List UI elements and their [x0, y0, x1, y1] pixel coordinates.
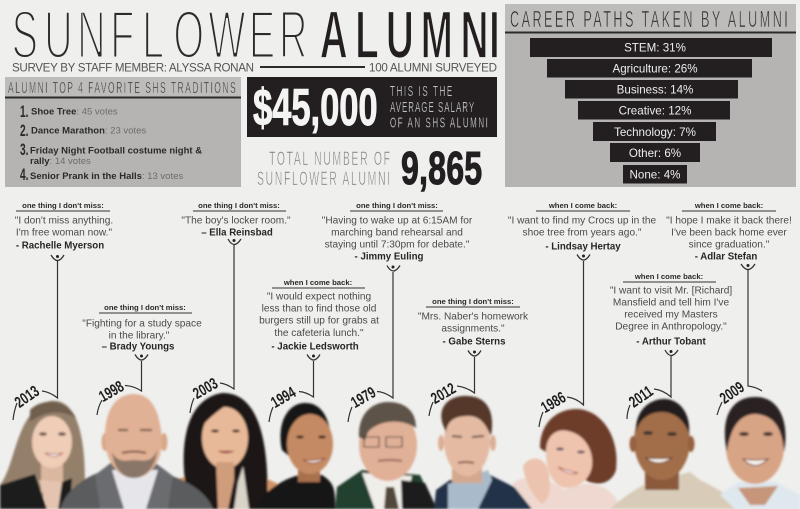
callout: Ella Reinsbad: "The boy's locker room."	[181, 216, 291, 226]
timeline: 2003	[189, 239, 241, 413]
timeline: 1986: 1986	[537, 388, 569, 416]
callout: Gabe Sterns: "Mrs. Naber's homework	[418, 312, 529, 322]
callout: Jimmy Euling: one thing I don't miss:	[356, 201, 438, 210]
callout: Adlar Stefan	[666, 201, 792, 262]
callout: Jackie Ledsworth: - Jackie Ledsworth	[271, 342, 359, 352]
callout: Gabe Sterns	[418, 297, 529, 348]
callout: Jimmy Euling: marching band rehearsal and	[331, 228, 463, 238]
callout: Brady Youngs	[82, 303, 202, 352]
salary caption: THIS IS THE	[390, 84, 452, 100]
callout: Arthur Tobant: Mansfield and tell him I've	[613, 298, 729, 308]
callout: Brady Youngs: "Fighting for a study space	[82, 318, 202, 330]
callout: Arthur Tobant: - Arthur Tobant	[636, 336, 706, 348]
funnel chart: None: 4%	[630, 168, 680, 182]
salary caption: AVERAGE SALARY	[390, 100, 474, 116]
callout: Jackie Ledsworth: the cafeteria lunch."	[274, 328, 364, 339]
callout: Jackie Ledsworth: less than to find those old	[262, 304, 376, 314]
callout: Jimmy Euling	[322, 201, 473, 262]
title	[12, 0, 500, 73]
timeline: 1979	[347, 266, 400, 422]
timeline: 2012	[427, 350, 481, 416]
timeline: 1979: 1979	[347, 383, 379, 411]
total alumni stat: TOTAL NUMBER OF	[269, 149, 390, 170]
callout: Ella Reinsbad	[181, 201, 291, 238]
callout: Adlar Stefan: I've been back home ever	[671, 228, 787, 238]
portrait: 1998 man	[60, 394, 213, 509]
callout: Adlar Stefan: - Adlar Stefan	[695, 252, 757, 262]
total alumni stat: SUNFLOWER ALUMNI	[257, 169, 390, 190]
timeline: 1994: 1994	[267, 383, 299, 411]
callout: Lindsay Hertay: when I come back:	[548, 201, 617, 210]
portrait: 1986 woman	[512, 409, 621, 509]
funnel chart: Business: 14%	[617, 84, 693, 96]
salary caption	[390, 84, 488, 131]
list: traditions: 2.	[20, 120, 29, 140]
callout: Lindsay Hertay: - Lindsay Hertay	[545, 242, 621, 252]
callout: Arthur Tobant: "I want to visit Mr. [Richard]	[610, 286, 732, 296]
heading: traditions: ALUMNI TOP 4 FAVORITE SHS TRADITIONS	[8, 79, 236, 97]
heading: career paths: CAREER PATHS TAKEN BY ALUMNI	[510, 6, 788, 32]
timeline: 2009	[716, 264, 762, 415]
callout: Jackie Ledsworth: "I would expect nothing	[267, 292, 371, 302]
funnel chart: Other: 6%	[629, 147, 681, 160]
portrait: 2009 man	[720, 397, 800, 509]
funnel chart	[530, 38, 772, 184]
funnel chart: Creative: 12%	[619, 104, 691, 118]
timeline: 2009: 2009	[716, 377, 748, 407]
callout: Adlar Stefan: when I come back:	[694, 201, 763, 210]
funnel chart: Technology: 7%	[614, 126, 696, 139]
timeline: 2013: 2013	[11, 381, 43, 411]
total alumni stat	[257, 143, 482, 194]
callout: Jackie Ledsworth: when I come back:	[283, 278, 352, 287]
funnel chart: STEM: 31%	[624, 42, 686, 54]
list: traditions: rally: 14 votes	[30, 156, 91, 167]
timeline: 2011	[625, 350, 678, 419]
portrait: 1994 woman	[254, 403, 335, 509]
callout: Arthur Tobant: when I come back:	[634, 272, 703, 281]
portrait: 1979 man	[335, 402, 437, 509]
callout: Lindsay Hertay: shoe tree from years ago."	[523, 228, 642, 238]
list: traditions: Friday Night Football costume night &	[30, 146, 202, 156]
portraits row	[0, 393, 800, 509]
timeline: 1994	[267, 354, 320, 422]
portrait: 2011 man	[610, 399, 741, 509]
callout: Arthur Tobant: received my Masters	[624, 310, 718, 320]
callout: Rachelle Myerson: - Rachelle Myerson	[16, 240, 104, 252]
timeline: 1986	[537, 254, 590, 427]
survey credit line: 100 ALUMNI SURVEYED	[369, 62, 497, 74]
callout: Gabe Sterns: assignments."	[441, 324, 505, 334]
callout: Rachelle Myerson: one thing I don't miss:	[22, 201, 104, 210]
survey credit line	[12, 62, 497, 74]
panel: average salary	[247, 77, 497, 137]
timeline: 2013	[11, 255, 64, 420]
callout: Arthur Tobant	[610, 272, 732, 348]
callout: Brady Youngs: one thing I don't miss:	[104, 303, 186, 312]
callout: Lindsay Hertay	[508, 201, 656, 252]
timeline: 1998	[95, 354, 148, 415]
salary figure: $45,000	[253, 79, 378, 137]
callout: Ella Reinsbad: – Ella Reinsbad	[201, 228, 273, 238]
timeline: 2012: 2012	[427, 379, 459, 407]
list: traditions: 1.	[20, 101, 29, 121]
list: traditions: Shoe Tree: 45 votes	[31, 106, 118, 118]
callout: Jimmy Euling: "Having to wake up at 6:15AM for	[322, 216, 473, 226]
callout: Brady Youngs: – Brady Youngs	[102, 342, 174, 352]
callout: Lindsay Hertay: "I want to find my Crocs up in the	[508, 216, 656, 226]
total alumni stat: 9,865	[401, 143, 482, 194]
callout: Jackie Ledsworth: burgers still up for grabs at	[259, 316, 379, 326]
list: traditions: 3.	[20, 139, 29, 159]
callout: Rachelle Myerson: "I don't miss anything.	[15, 216, 113, 226]
callout: Rachelle Myerson: I'm free woman now."	[16, 228, 112, 238]
survey credit line: SURVEY BY STAFF MEMBER: ALYSSA RONAN	[12, 62, 254, 74]
callout: Adlar Stefan: "I hope I make it back there!	[666, 216, 792, 226]
portrait: 2013 woman	[0, 401, 85, 509]
callout: Ella Reinsbad: one thing I don't miss:	[198, 201, 280, 210]
salary caption: OF AN SHS ALUMNI	[390, 115, 488, 131]
callout: Gabe Sterns: one thing I don't miss:	[432, 297, 514, 306]
callout: Arthur Tobant: Degree in Anthropology."	[615, 322, 727, 332]
panel: career paths	[505, 4, 796, 187]
callout: Jackie Ledsworth	[259, 278, 379, 352]
timeline: 1998: 1998	[95, 377, 127, 405]
callout: Jimmy Euling: - Jimmy Euling	[355, 252, 424, 262]
list: traditions: 4.	[20, 164, 29, 184]
list: traditions	[20, 101, 202, 184]
portrait: 2012 man	[434, 396, 541, 509]
callout: Gabe Sterns: - Gabe Sterns	[442, 336, 506, 348]
timeline: 2011: 2011	[625, 381, 656, 411]
list: traditions: Senior Prank in the Halls: 13 votes	[30, 171, 183, 182]
funnel chart: Agriculture: 26%	[612, 62, 698, 76]
callout: Jimmy Euling: staying until 7:30pm for debate."	[325, 240, 470, 250]
callout: Brady Youngs: in the library."	[109, 330, 170, 342]
list: traditions: Dance Marathon: 23 votes	[31, 126, 146, 136]
callout: Rachelle Myerson	[15, 201, 113, 252]
portrait: 2003 woman	[176, 393, 282, 509]
callout: Adlar Stefan: since graduation."	[689, 240, 770, 250]
panel: favorite traditions	[5, 77, 241, 187]
timeline: 2003: 2003	[189, 374, 221, 402]
